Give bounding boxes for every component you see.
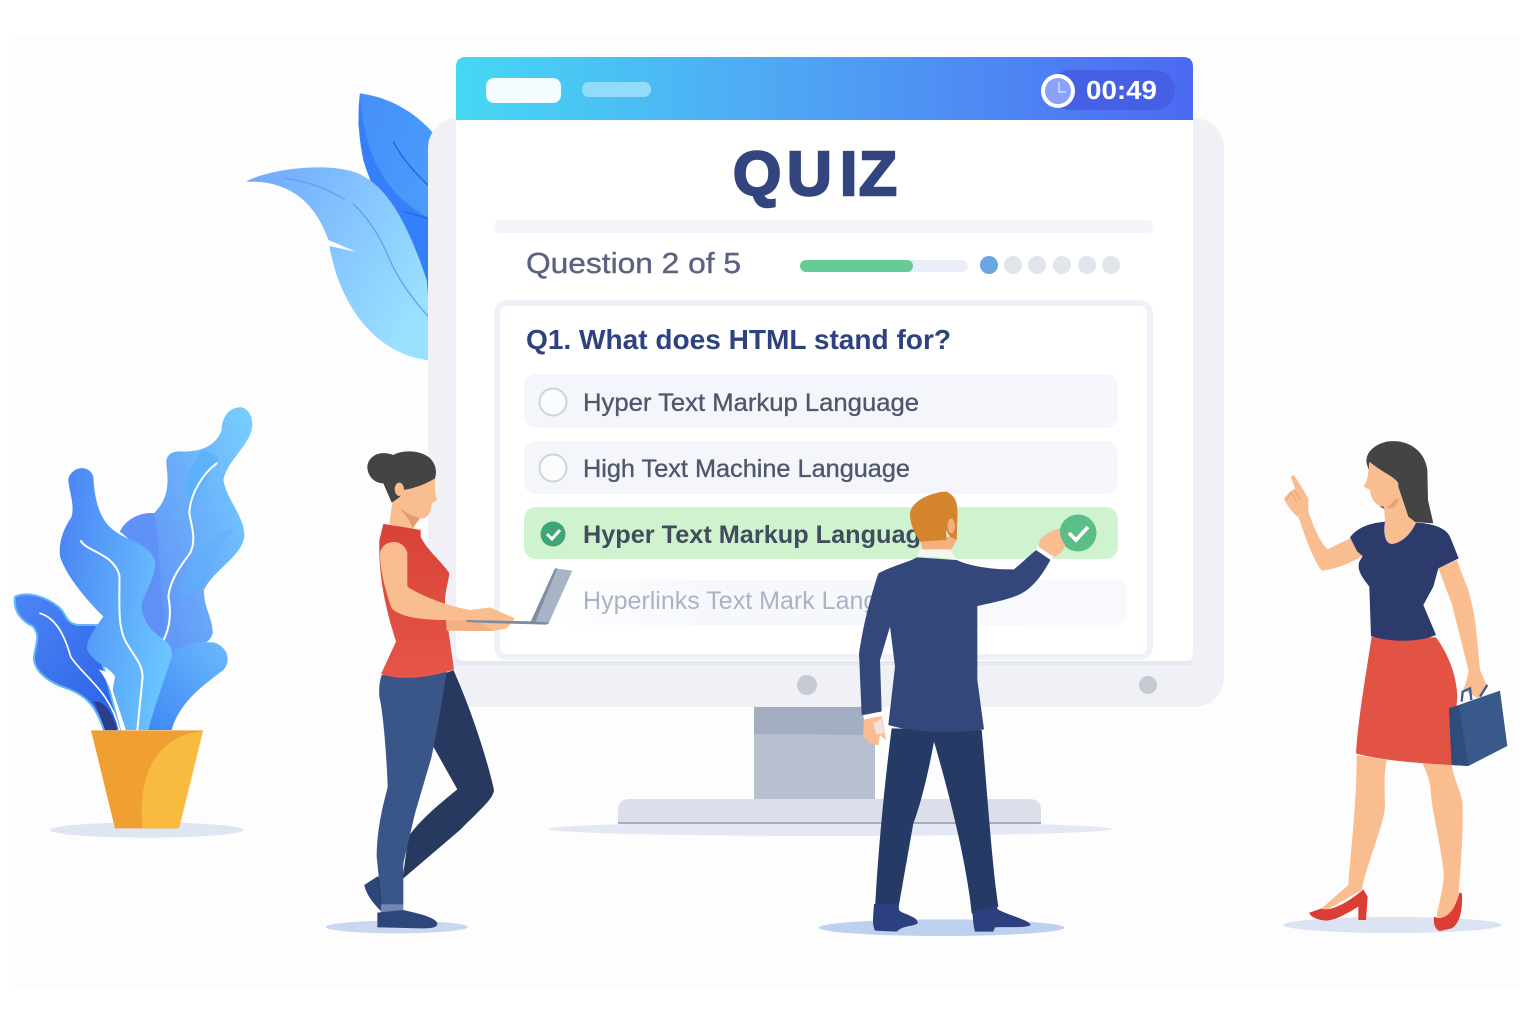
progress bar	[800, 260, 968, 272]
hair	[910, 492, 958, 542]
question heading: Q1. What does HTML stand for?	[526, 324, 951, 355]
monitor bezel	[428, 118, 1224, 707]
neck	[1383, 487, 1416, 544]
jacket	[859, 549, 1051, 732]
timer: 00:49	[1086, 75, 1157, 105]
shoes	[873, 904, 1031, 932]
divider bar	[494, 220, 1153, 233]
ear	[948, 519, 955, 533]
answer option 3 correct: Hyper Text Markup Language	[583, 521, 935, 549]
neck	[389, 500, 420, 529]
leaf: far left dark	[15, 594, 120, 730]
leaf: centre	[60, 468, 172, 730]
pointing hand	[1284, 475, 1308, 517]
right arm	[1438, 560, 1487, 698]
collar	[917, 549, 956, 559]
timer	[1043, 70, 1175, 110]
plant shadow	[50, 822, 243, 838]
arm	[380, 542, 515, 631]
lower hand	[863, 715, 886, 745]
answer option 1	[524, 374, 1118, 428]
title: QUIZ	[733, 140, 897, 209]
face	[1364, 462, 1398, 507]
figure: woman with bag	[1283, 441, 1507, 933]
monitor stand	[548, 707, 1112, 836]
legs	[1322, 755, 1463, 920]
figure: man in suit pointing at answer	[819, 492, 1065, 936]
answer option 2: High Text Machine Language	[583, 455, 910, 483]
leaf: tall right	[120, 407, 252, 677]
back leg	[364, 670, 494, 912]
answer option 3 correct	[524, 507, 1118, 559]
answer option 2	[524, 441, 1118, 494]
top	[1350, 522, 1459, 641]
top	[379, 524, 454, 678]
hair back	[1366, 441, 1433, 523]
shopping bag	[1449, 685, 1507, 766]
header bar	[456, 57, 1193, 120]
leaf veins	[40, 463, 217, 730]
answer option 1: Hyper Text Markup Language	[583, 389, 919, 417]
answer option 4 faded	[530, 580, 1127, 625]
ear	[395, 483, 404, 496]
screen bottom shadow	[456, 661, 1193, 665]
shadow	[819, 919, 1064, 936]
progress dots	[980, 256, 1120, 274]
panel: monitor	[428, 57, 1224, 836]
trousers	[875, 728, 998, 913]
shadow	[1283, 917, 1501, 933]
panel: question card	[497, 303, 1150, 657]
skirt	[1356, 637, 1457, 765]
front leg	[377, 672, 447, 905]
answer option 4 faded: Hyperlinks Text Mark Language	[583, 587, 933, 615]
icon: potted plant	[15, 407, 252, 838]
icon: large blue leaves behind monitor	[246, 93, 467, 380]
laptop	[466, 568, 572, 625]
shadow	[326, 921, 468, 933]
figure: woman with laptop	[326, 451, 572, 933]
shoe	[377, 910, 437, 928]
leaf: low right	[148, 642, 228, 730]
heels	[1309, 889, 1462, 931]
screen	[456, 120, 1193, 661]
question counter: Question 2 of 5	[526, 248, 741, 280]
hair	[367, 451, 436, 503]
cuffs	[1036, 546, 1053, 560]
hand pointing	[1038, 528, 1065, 557]
raised arm	[1298, 512, 1363, 571]
pot	[91, 730, 203, 828]
neck	[920, 523, 957, 552]
head	[393, 473, 437, 518]
monitor buttons	[797, 675, 1157, 695]
